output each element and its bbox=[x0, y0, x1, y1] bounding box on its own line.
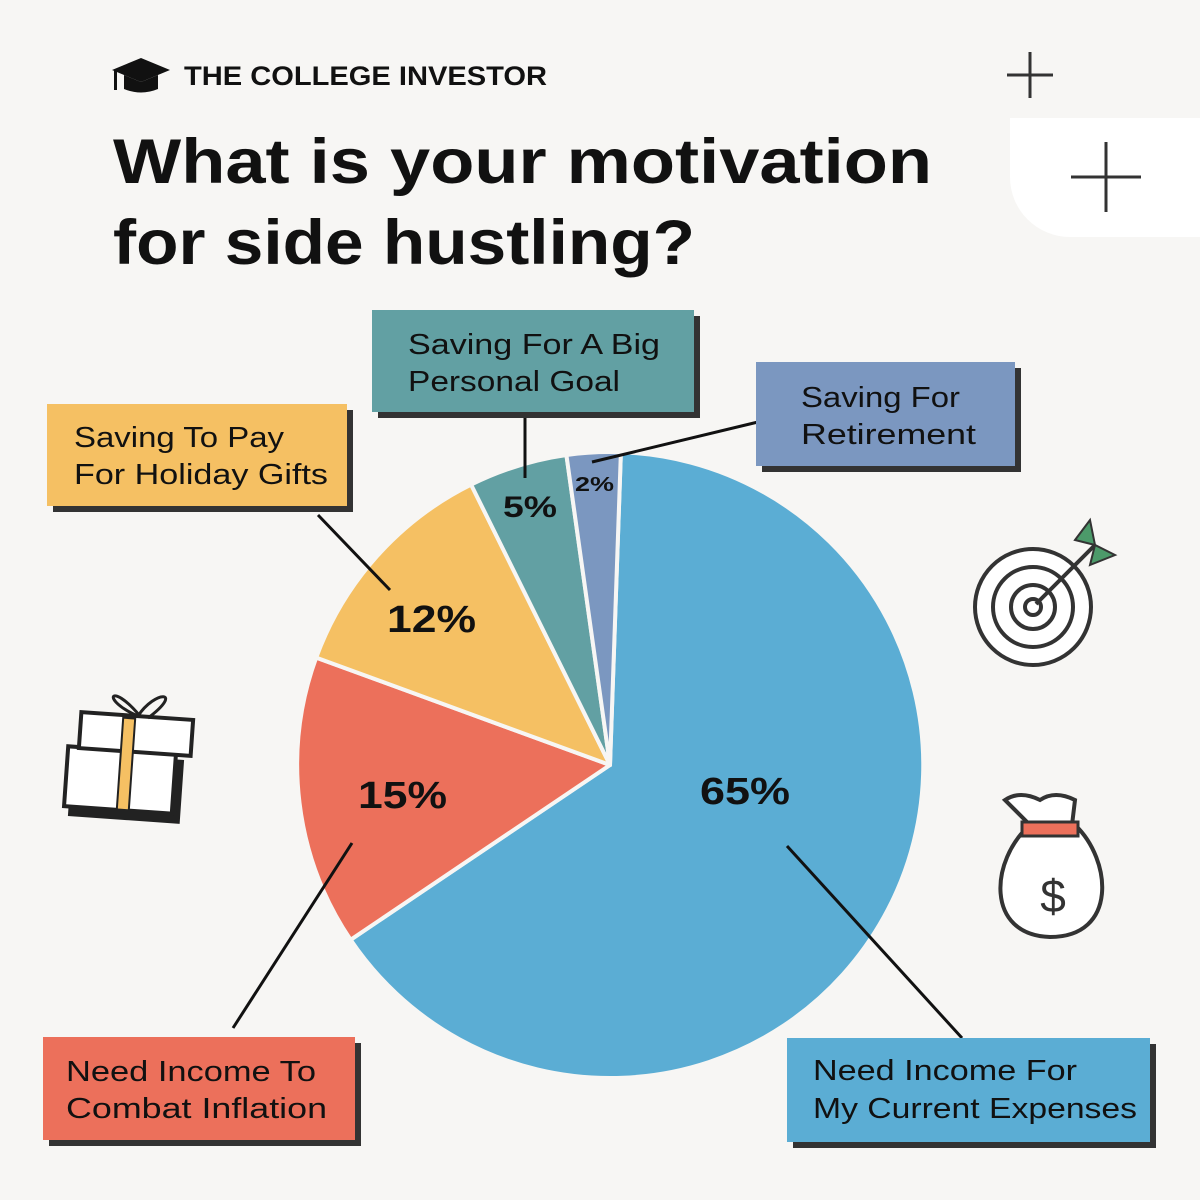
slice values bbox=[358, 474, 790, 817]
decorative plus marks bbox=[1007, 52, 1200, 237]
label: holiday gifts: For Holiday Gifts bbox=[74, 459, 328, 491]
title bbox=[113, 127, 932, 278]
label: current expenses bbox=[787, 1038, 1156, 1148]
icon: graduation cap bbox=[112, 58, 170, 92]
logo bbox=[112, 58, 547, 92]
slice values: 5% bbox=[503, 491, 557, 524]
leader lines bbox=[233, 418, 962, 1038]
label: retirement: Retirement bbox=[801, 419, 976, 451]
label: retirement: Saving For bbox=[801, 382, 960, 414]
label: big personal goal: Saving For A Big bbox=[408, 329, 660, 361]
label: holiday gifts bbox=[47, 404, 353, 512]
label: big personal goal: Personal Goal bbox=[408, 366, 620, 398]
slice values: 15% bbox=[358, 775, 447, 817]
title: for side hustling? bbox=[113, 208, 695, 278]
icon: target bbox=[975, 520, 1115, 665]
icon: gift bbox=[64, 696, 193, 822]
icon: money bag bbox=[1000, 795, 1102, 937]
label: retirement bbox=[756, 362, 1021, 472]
slice values: 12% bbox=[387, 599, 476, 641]
slice: 15% inflation bbox=[297, 658, 610, 940]
label: current expenses: Need Income For bbox=[813, 1055, 1077, 1087]
label: inflation: Need Income To bbox=[66, 1056, 316, 1088]
slice: 2% retirement bbox=[566, 452, 621, 765]
title: What is your motivation bbox=[113, 127, 932, 197]
label: big personal goal bbox=[372, 310, 700, 418]
label: inflation: Combat Inflation bbox=[66, 1093, 327, 1125]
pie chart bbox=[297, 452, 923, 1078]
slice values: 2% bbox=[575, 474, 614, 496]
logo: THE COLLEGE INVESTOR bbox=[184, 61, 547, 91]
icon: money bag: $ bbox=[1040, 870, 1066, 922]
label: current expenses: My Current Expenses bbox=[813, 1093, 1137, 1125]
label: inflation bbox=[43, 1037, 361, 1146]
slice: 5% big goal bbox=[471, 455, 610, 765]
slice values: 65% bbox=[700, 771, 790, 813]
slice: 12% holiday gifts bbox=[316, 485, 610, 765]
slice: 65% current expenses bbox=[351, 452, 923, 1078]
label: holiday gifts: Saving To Pay bbox=[74, 422, 285, 454]
